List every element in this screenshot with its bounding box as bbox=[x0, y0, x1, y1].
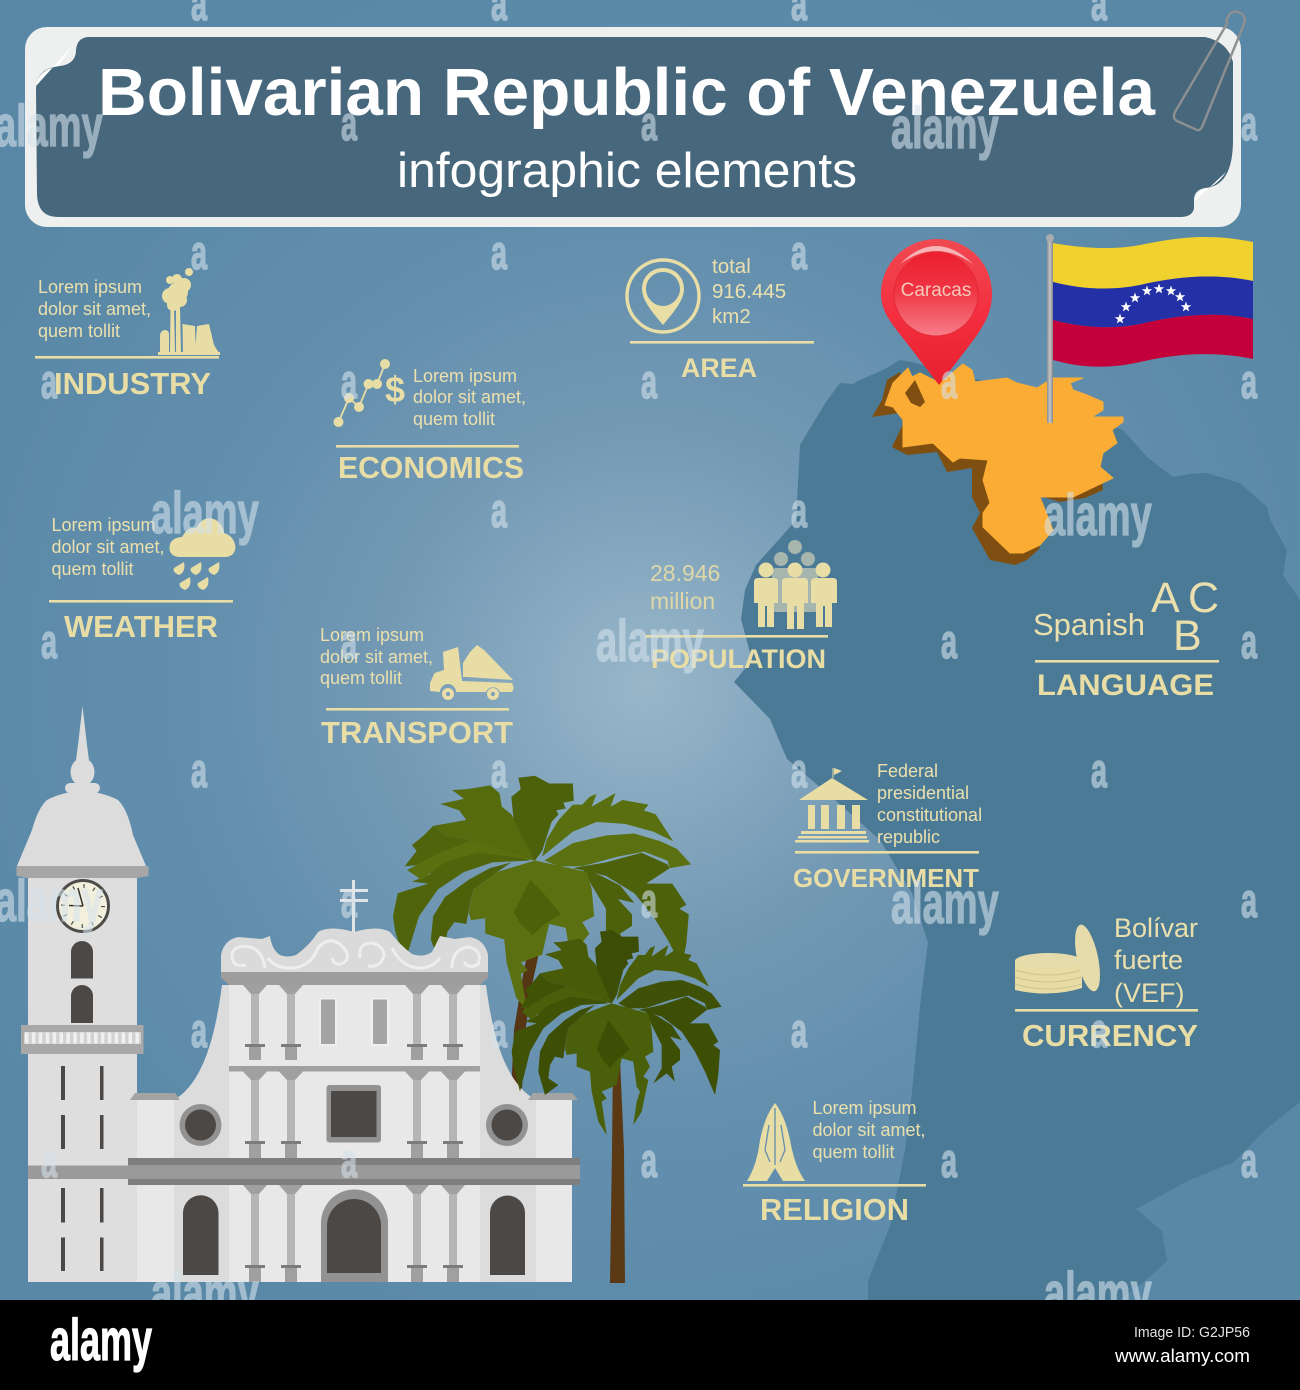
stock watermarks: a bbox=[341, 1135, 358, 1188]
stock watermarks: a bbox=[1091, 1005, 1108, 1058]
weather text: quem tollit bbox=[52, 559, 134, 579]
stock watermarks: a bbox=[1241, 616, 1258, 669]
icon: dump truck bbox=[430, 645, 514, 699]
transport text: dolor sit amet, bbox=[320, 647, 433, 667]
large fronds bbox=[393, 776, 691, 1013]
palm tree: small bbox=[512, 930, 722, 1283]
stock watermarks: a bbox=[941, 1135, 958, 1188]
religion text: dolor sit amet, bbox=[812, 1120, 926, 1140]
tower slit windows bbox=[61, 1066, 104, 1271]
stock watermarks: a bbox=[41, 1135, 58, 1188]
religion divider bbox=[743, 1184, 926, 1187]
map pin: Caracas bbox=[881, 239, 992, 385]
economics text: Lorem ipsum bbox=[413, 366, 517, 386]
stock watermarks: a bbox=[191, 745, 208, 798]
footer logo: alamy bbox=[50, 1308, 152, 1373]
transport heading: TRANSPORT bbox=[321, 715, 513, 750]
title: Bolivarian Republic of Venezuela bbox=[98, 55, 1156, 130]
religion heading: RELIGION bbox=[760, 1193, 909, 1227]
church entablature bbox=[221, 972, 488, 985]
section: weather bbox=[49, 515, 236, 644]
church low outer walls bbox=[137, 1100, 572, 1282]
stock watermarks: alamy bbox=[1044, 1262, 1152, 1326]
map body bbox=[885, 364, 1123, 553]
stock watermarks: a bbox=[641, 875, 658, 928]
church columns bbox=[243, 985, 465, 1282]
flag stars bbox=[1115, 284, 1191, 323]
religion text: Lorem ipsum bbox=[812, 1098, 917, 1118]
icon: growth chart and dollar: $ bbox=[385, 369, 405, 410]
tower dome bbox=[17, 790, 146, 866]
stock watermarks: a bbox=[941, 616, 958, 669]
stock watermarks: alamy bbox=[891, 97, 999, 161]
weather heading: WEATHER bbox=[64, 610, 218, 644]
dome cornice bbox=[16, 866, 148, 878]
footer url: www.alamy.com bbox=[1114, 1346, 1250, 1366]
icon: praying hands bbox=[747, 1103, 805, 1181]
map: South America silhouette bbox=[734, 360, 1300, 1300]
population divider bbox=[645, 635, 828, 638]
government text: Federal bbox=[877, 761, 938, 781]
map: Venezuela bbox=[872, 364, 1123, 565]
stock watermarks: a bbox=[491, 227, 508, 280]
economics text: dolor sit amet, bbox=[413, 387, 526, 407]
population text: million bbox=[650, 588, 715, 614]
church shoulder cornices bbox=[130, 1093, 578, 1100]
transport divider bbox=[326, 708, 509, 711]
section: population bbox=[645, 540, 837, 674]
population heading: POPULATION bbox=[651, 644, 826, 674]
stock watermarks: a bbox=[41, 616, 58, 669]
stock watermarks: a bbox=[341, 356, 358, 409]
language heading: LANGUAGE bbox=[1037, 669, 1214, 702]
church main band bbox=[128, 1158, 580, 1185]
stock watermarks: a bbox=[491, 485, 508, 538]
church upper windows bbox=[319, 998, 389, 1046]
lake Maracaibo bbox=[905, 380, 925, 407]
church lower windows bbox=[183, 1195, 525, 1275]
section: currency bbox=[1015, 913, 1198, 1053]
church pediment bbox=[221, 928, 488, 972]
header banner bbox=[25, 12, 1245, 227]
pin button bbox=[894, 252, 978, 336]
section: government bbox=[793, 761, 982, 893]
area text: total bbox=[712, 255, 751, 278]
section: economics bbox=[334, 359, 526, 485]
stock watermarks: alamy bbox=[151, 1262, 259, 1326]
tower spire bbox=[65, 706, 100, 793]
government text: presidential bbox=[877, 783, 969, 803]
church with clock tower bbox=[16, 706, 580, 1282]
area text: 916.445 bbox=[712, 280, 786, 303]
image id: Image ID: G2JP56 bbox=[1134, 1324, 1250, 1341]
large trunk bbox=[511, 925, 545, 1095]
industry divider bbox=[35, 356, 219, 359]
weather text: Lorem ipsum bbox=[52, 515, 156, 535]
section: transport bbox=[320, 625, 514, 750]
palm tree: large bbox=[393, 776, 691, 1095]
icon: rain cloud bbox=[169, 518, 236, 590]
page curl highlights bbox=[36, 44, 1226, 202]
section: area bbox=[627, 255, 814, 383]
currency divider bbox=[1015, 1009, 1198, 1012]
icon: letters: C bbox=[1188, 574, 1219, 622]
stock watermarks: a bbox=[1241, 1135, 1258, 1188]
stock watermarks: a bbox=[641, 98, 658, 151]
stock watermarks: a bbox=[191, 227, 208, 280]
banner paper frame bbox=[25, 27, 1241, 227]
stock watermarks: a bbox=[341, 875, 358, 928]
stock watermarks: a bbox=[1241, 875, 1258, 928]
church central wall bbox=[229, 985, 480, 1282]
tower body bbox=[28, 878, 137, 1282]
icon: letters: B bbox=[1173, 612, 1202, 660]
area divider bbox=[630, 341, 814, 344]
icon: factory bbox=[158, 268, 220, 355]
icon: clock bbox=[58, 880, 108, 932]
map shadow bbox=[872, 372, 1103, 565]
church gabled body bbox=[137, 985, 572, 1282]
stock watermarks: a bbox=[1241, 98, 1258, 151]
section: industry bbox=[35, 268, 220, 401]
section: language bbox=[1033, 574, 1219, 702]
economics heading: ECONOMICS bbox=[338, 452, 524, 485]
stock watermarks: a bbox=[1241, 356, 1258, 409]
stock watermarks: alamy bbox=[891, 872, 999, 936]
icon: growth chart and dollar bbox=[334, 359, 405, 427]
stock watermarks: a bbox=[791, 1005, 808, 1058]
industry heading: INDUSTRY bbox=[54, 367, 211, 401]
currency text: Bolívar bbox=[1114, 913, 1198, 943]
pin body bbox=[881, 239, 992, 385]
currency heading: CURRENCY bbox=[1022, 1019, 1198, 1053]
church centre window bbox=[326, 1085, 381, 1142]
stock watermarks: a bbox=[941, 356, 958, 409]
transport text: quem tollit bbox=[320, 668, 402, 688]
icon: coins bbox=[1015, 923, 1105, 994]
stock watermarks: a bbox=[491, 745, 508, 798]
currency text: (VEF) bbox=[1114, 978, 1184, 1008]
population text: 28.946 bbox=[650, 560, 720, 586]
pin label: Caracas bbox=[901, 280, 971, 301]
stock watermarks: alamy bbox=[1044, 484, 1152, 548]
stock watermarks: a bbox=[41, 356, 58, 409]
government text: constitutional bbox=[877, 805, 982, 825]
subtitle: infographic elements bbox=[397, 144, 857, 198]
area heading: AREA bbox=[681, 353, 757, 383]
small fronds bbox=[512, 930, 722, 1135]
icon: letters: A bbox=[1151, 574, 1180, 622]
government divider bbox=[795, 851, 979, 854]
pin highlight bbox=[900, 246, 973, 264]
stock watermarks: alamy bbox=[596, 610, 704, 674]
stock watermarks: a bbox=[1091, 745, 1108, 798]
transport text: Lorem ipsum bbox=[320, 625, 424, 645]
industry text: Lorem ipsum bbox=[38, 277, 142, 297]
religion text: quem tollit bbox=[812, 1142, 895, 1162]
cross bbox=[340, 880, 368, 932]
economics divider bbox=[336, 445, 519, 448]
tower balcony bbox=[21, 1025, 144, 1054]
language text: Spanish bbox=[1033, 607, 1145, 642]
church mid band bbox=[229, 1066, 480, 1072]
flag of Venezuela bbox=[1046, 234, 1253, 423]
government text: republic bbox=[877, 827, 940, 847]
stock watermarks: a bbox=[191, 1005, 208, 1058]
stock watermarks: a bbox=[791, 745, 808, 798]
stock watermarks: a bbox=[341, 98, 358, 151]
section: religion bbox=[743, 1098, 926, 1227]
economics text: quem tollit bbox=[413, 409, 495, 429]
area text: km2 bbox=[712, 305, 751, 328]
currency text: fuerte bbox=[1114, 945, 1183, 975]
icon: people group bbox=[754, 540, 837, 629]
pediment scrolls bbox=[232, 941, 479, 968]
stock watermarks: a bbox=[641, 1135, 658, 1188]
stock watermarks: a bbox=[641, 356, 658, 409]
weather divider bbox=[49, 600, 233, 603]
stock watermarks: alamy bbox=[151, 482, 259, 546]
language divider bbox=[1035, 660, 1219, 663]
small trunk bbox=[610, 1060, 625, 1283]
stock watermarks: a bbox=[491, 1005, 508, 1058]
tower upper windows bbox=[71, 941, 93, 1023]
industry text: quem tollit bbox=[38, 321, 120, 341]
flag pole bbox=[1046, 234, 1054, 423]
icon: government building bbox=[795, 768, 869, 842]
flag stripes bbox=[1053, 237, 1253, 367]
footer bar bbox=[0, 1300, 1300, 1390]
icon: area pin in circle bbox=[627, 260, 699, 332]
government heading: GOVERNMENT bbox=[793, 863, 979, 893]
icon: paperclip bbox=[1174, 12, 1245, 130]
tower band bbox=[28, 1166, 137, 1179]
stock watermarks: a bbox=[791, 485, 808, 538]
stock watermarks: a bbox=[791, 227, 808, 280]
church door bbox=[321, 1190, 388, 1282]
banner dark panel bbox=[36, 37, 1233, 217]
footer background bbox=[0, 1300, 1300, 1390]
industry text: dolor sit amet, bbox=[38, 299, 151, 319]
stock watermarks: a bbox=[341, 616, 358, 669]
church round windows bbox=[180, 1104, 528, 1146]
weather text: dolor sit amet, bbox=[52, 537, 165, 557]
